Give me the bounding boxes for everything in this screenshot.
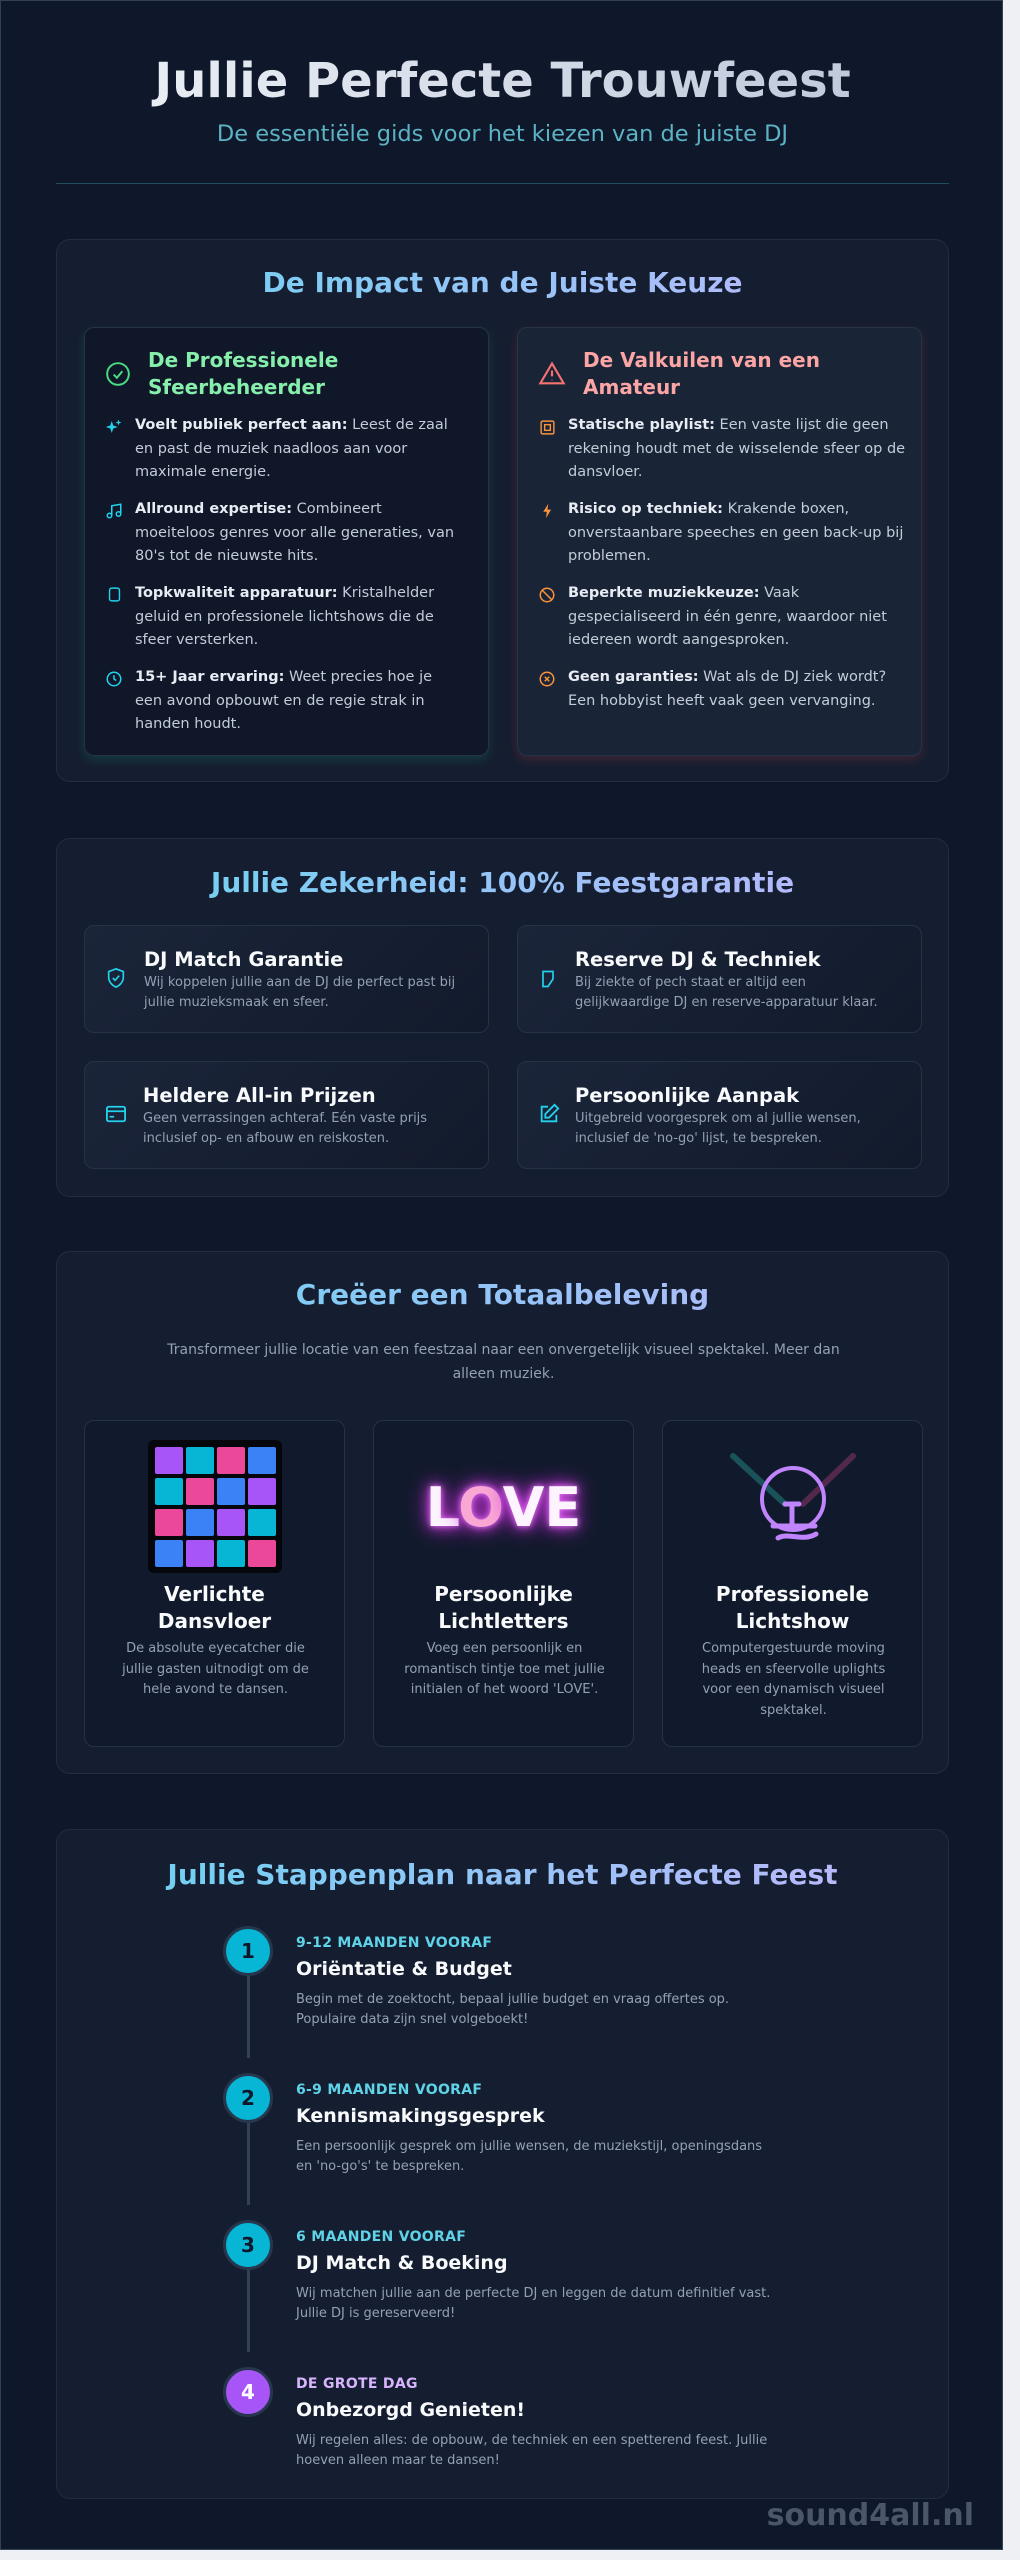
icon: moving head (730, 1453, 856, 1540)
item: muziekkeuze: Beperkte muziekkeuze: Vaak gespecialiseerd in één genre, waardoor niet iedereen wordt aangesproken. (568, 585, 887, 648)
card: lichtletters: Lichtletters (438, 1609, 569, 1633)
icon: shield (108, 968, 124, 988)
heading: amateur (583, 348, 820, 399)
intro text: alleen muziek. (453, 1366, 554, 1382)
heading: amateur: Amateur (583, 375, 680, 399)
card: lichtletters (373, 1420, 634, 1747)
step 2: en 'no-go's' te bespreken. (296, 2159, 464, 2174)
icon: device (108, 587, 120, 602)
icon: bolt (543, 504, 551, 518)
card: reserve: gelijkwaardige DJ en reserve-apparatuur klaar. (575, 995, 878, 1010)
item: techniek: Risico op techniek: Krakende boxen, onverstaanbare speeches en geen back-up bij problemen. (568, 501, 903, 564)
panel: amateur (517, 327, 922, 756)
card: dj match (84, 925, 489, 1033)
icon: music (106, 503, 122, 518)
heading: professional: De Professionele (148, 348, 338, 372)
heading: stappenplan (57, 1857, 948, 1893)
icon: clock (106, 672, 122, 686)
heading: guarantee (57, 865, 948, 901)
step 2: Een persoonlijk gesprek om jullie wensen, de muziekstijl, openingsdans (296, 2139, 762, 2154)
heading: totaalbeleving: Creëer een Totaalbeleving (296, 1278, 709, 1311)
step 3: 3 (241, 2233, 255, 2257)
card: dansvloer: De absolute eyecatcher die jullie gasten uitnodigt om de hele avond te dansen. (122, 1641, 309, 1697)
panel: totaalbeleving (56, 1251, 949, 1774)
heading: amateur: De Valkuilen van een (583, 348, 820, 372)
card: reserve: Reserve DJ & Techniek (575, 948, 821, 971)
step 1: 9-12 MAANDEN VOORAF (296, 1935, 492, 1951)
panel: professional (84, 327, 489, 756)
card: lichtshow: Lichtshow (736, 1609, 849, 1633)
card: lichtletters: Persoonlijke (434, 1582, 573, 1606)
subtitle: De essentiële gids voor het kiezen van de juiste DJ (217, 121, 788, 147)
card: aanpak (517, 1061, 922, 1169)
step 1: Oriëntatie & Budget (296, 1958, 512, 1980)
step 2: 2 (241, 2086, 255, 2110)
icon: device (542, 970, 554, 988)
card: lichtletters: Voeg een persoonlijk en romantisch tintje toe met jullie initialen of het woord 'LOVE'. (404, 1641, 605, 1697)
panel: impact (56, 239, 949, 782)
heading: impact: De Impact van de Juiste Keuze (262, 266, 742, 299)
heading: stappenplan: Jullie Stappenplan naar het Perfecte Feest (167, 1858, 838, 1891)
icon: x circle (540, 672, 554, 686)
icon: warning (538, 362, 566, 384)
intro text (167, 1342, 840, 1382)
card: reserve (517, 925, 922, 1033)
icon: sparkles (106, 420, 122, 433)
icon: edit (540, 1104, 560, 1122)
step 4: Wij regelen alles: de opbouw, de techniek en een spetterend feest. Jullie (296, 2433, 767, 2448)
item: expertise (135, 501, 454, 564)
item: expertise: moeiteloos genres voor alle generaties, van 80's tot de nieuwste hits. (135, 524, 454, 564)
step 2 (223, 2073, 762, 2174)
heading: guarantee: Jullie Zekerheid: 100% Feestgarantie (211, 866, 794, 899)
step 2: 6-9 MAANDEN VOORAF (296, 2082, 482, 2098)
heading: totaalbeleving (57, 1277, 948, 1313)
item: garanties: Geen garanties: Wat als de DJ ziek wordt? Een hobbyist heeft vaak geen vervanging. (568, 669, 886, 708)
item: ervaring: 15+ Jaar ervaring: Weet precies hoe je een avond opbouwt en de regie strak in handen houdt. (135, 669, 432, 732)
icon: check circle (106, 362, 130, 386)
panel: stappenplan (56, 1829, 949, 2499)
step 3 (223, 2220, 770, 2321)
title (1, 51, 1004, 111)
icon: box (540, 420, 555, 435)
card: dansvloer: Verlichte (164, 1582, 265, 1606)
step 4: hoeven alleen maar te dansen! (296, 2453, 500, 2468)
card: aanpak: inclusief de 'no-go' lijst, te bespreken. (575, 1131, 822, 1146)
card: aanpak: Persoonlijke Aanpak (575, 1084, 799, 1107)
item: apparatuur: Topkwaliteit apparatuur: Kristalhelder geluid en professionele lichtshows die de sfeer versterken. (135, 585, 434, 648)
step 4: 4 (241, 2380, 255, 2404)
card: dansvloer: Dansvloer (158, 1609, 271, 1633)
step 1: Populaire data zijn snel volgeboekt! (296, 2012, 528, 2027)
card: prijzen: inclusief op- en afbouw en reiskosten. (143, 1131, 389, 1146)
card: prijzen: Heldere All-in Prijzen (143, 1084, 376, 1107)
watermark: sound4all.nl (767, 2498, 974, 2533)
title: Jullie Perfecte Trouwfeest (154, 53, 851, 109)
heading: professional (148, 348, 338, 399)
card: dj match: Wij koppelen jullie aan de DJ die perfect past bij jullie muzieksmaak en sfeer. (144, 975, 455, 1010)
heading: impact (57, 265, 948, 301)
item: playlist: Statische playlist: Een vaste lijst die geen rekening houdt met de wisselende sfeer op de dansvloer. (568, 417, 905, 480)
intro text: Transformeer jullie locatie van een feestzaal naar een onvergetelijk visueel spektakel. Meer dan (167, 1342, 840, 1358)
heading: professional: Sfeerbeheerder (148, 375, 325, 399)
card: prijzen: Geen verrassingen achteraf. Eén vaste prijs (143, 1111, 427, 1126)
item: publiek: Voelt publiek perfect aan: Leest de zaal en past de muziek naadloos aan voor maximale energie. (135, 417, 448, 480)
step 4: DE GROTE DAG (296, 2376, 418, 2392)
icon: LOVE neon: LOVE (426, 1476, 581, 1539)
card: dansvloer (84, 1420, 345, 1747)
card: reserve: Bij ziekte of pech staat er altijd een (575, 975, 806, 990)
step 1 (223, 1926, 729, 2027)
step 3: Jullie DJ is gereserveerd! (296, 2306, 455, 2321)
step 1: Begin met de zoektocht, bepaal jullie budget en vraag offertes op. (296, 1992, 729, 2007)
card: lichtshow: Professionele (716, 1582, 869, 1606)
step 2: Kennismakingsgesprek (296, 2105, 545, 2127)
card: lichtshow (662, 1420, 923, 1747)
step 3: DJ Match & Boeking (296, 2252, 508, 2274)
step 3: 6 MAANDEN VOORAF (296, 2229, 466, 2245)
icon: card (106, 1106, 126, 1122)
item: expertise: Allround expertise: Combineert (135, 501, 382, 517)
panel: guarantee (56, 838, 949, 1197)
step 4 (223, 2367, 767, 2468)
card: prijzen (84, 1061, 489, 1169)
step 1: 1 (241, 1939, 255, 1963)
icon: ban (540, 588, 554, 602)
step 4: Onbezorgd Genieten! (296, 2399, 525, 2421)
step 3: Wij matchen jullie aan de perfecte DJ en leggen de datum definitief vast. (296, 2286, 770, 2301)
icon: dance floor grid (148, 1440, 282, 1573)
card: dj match: DJ Match Garantie (144, 948, 343, 971)
card: aanpak: Uitgebreid voorgesprek om al jullie wensen, (575, 1111, 861, 1126)
card: lichtshow: Computergestuurde moving heads en sfeervolle uplights voor een dynamisch visueel spektakel. (702, 1641, 885, 1718)
